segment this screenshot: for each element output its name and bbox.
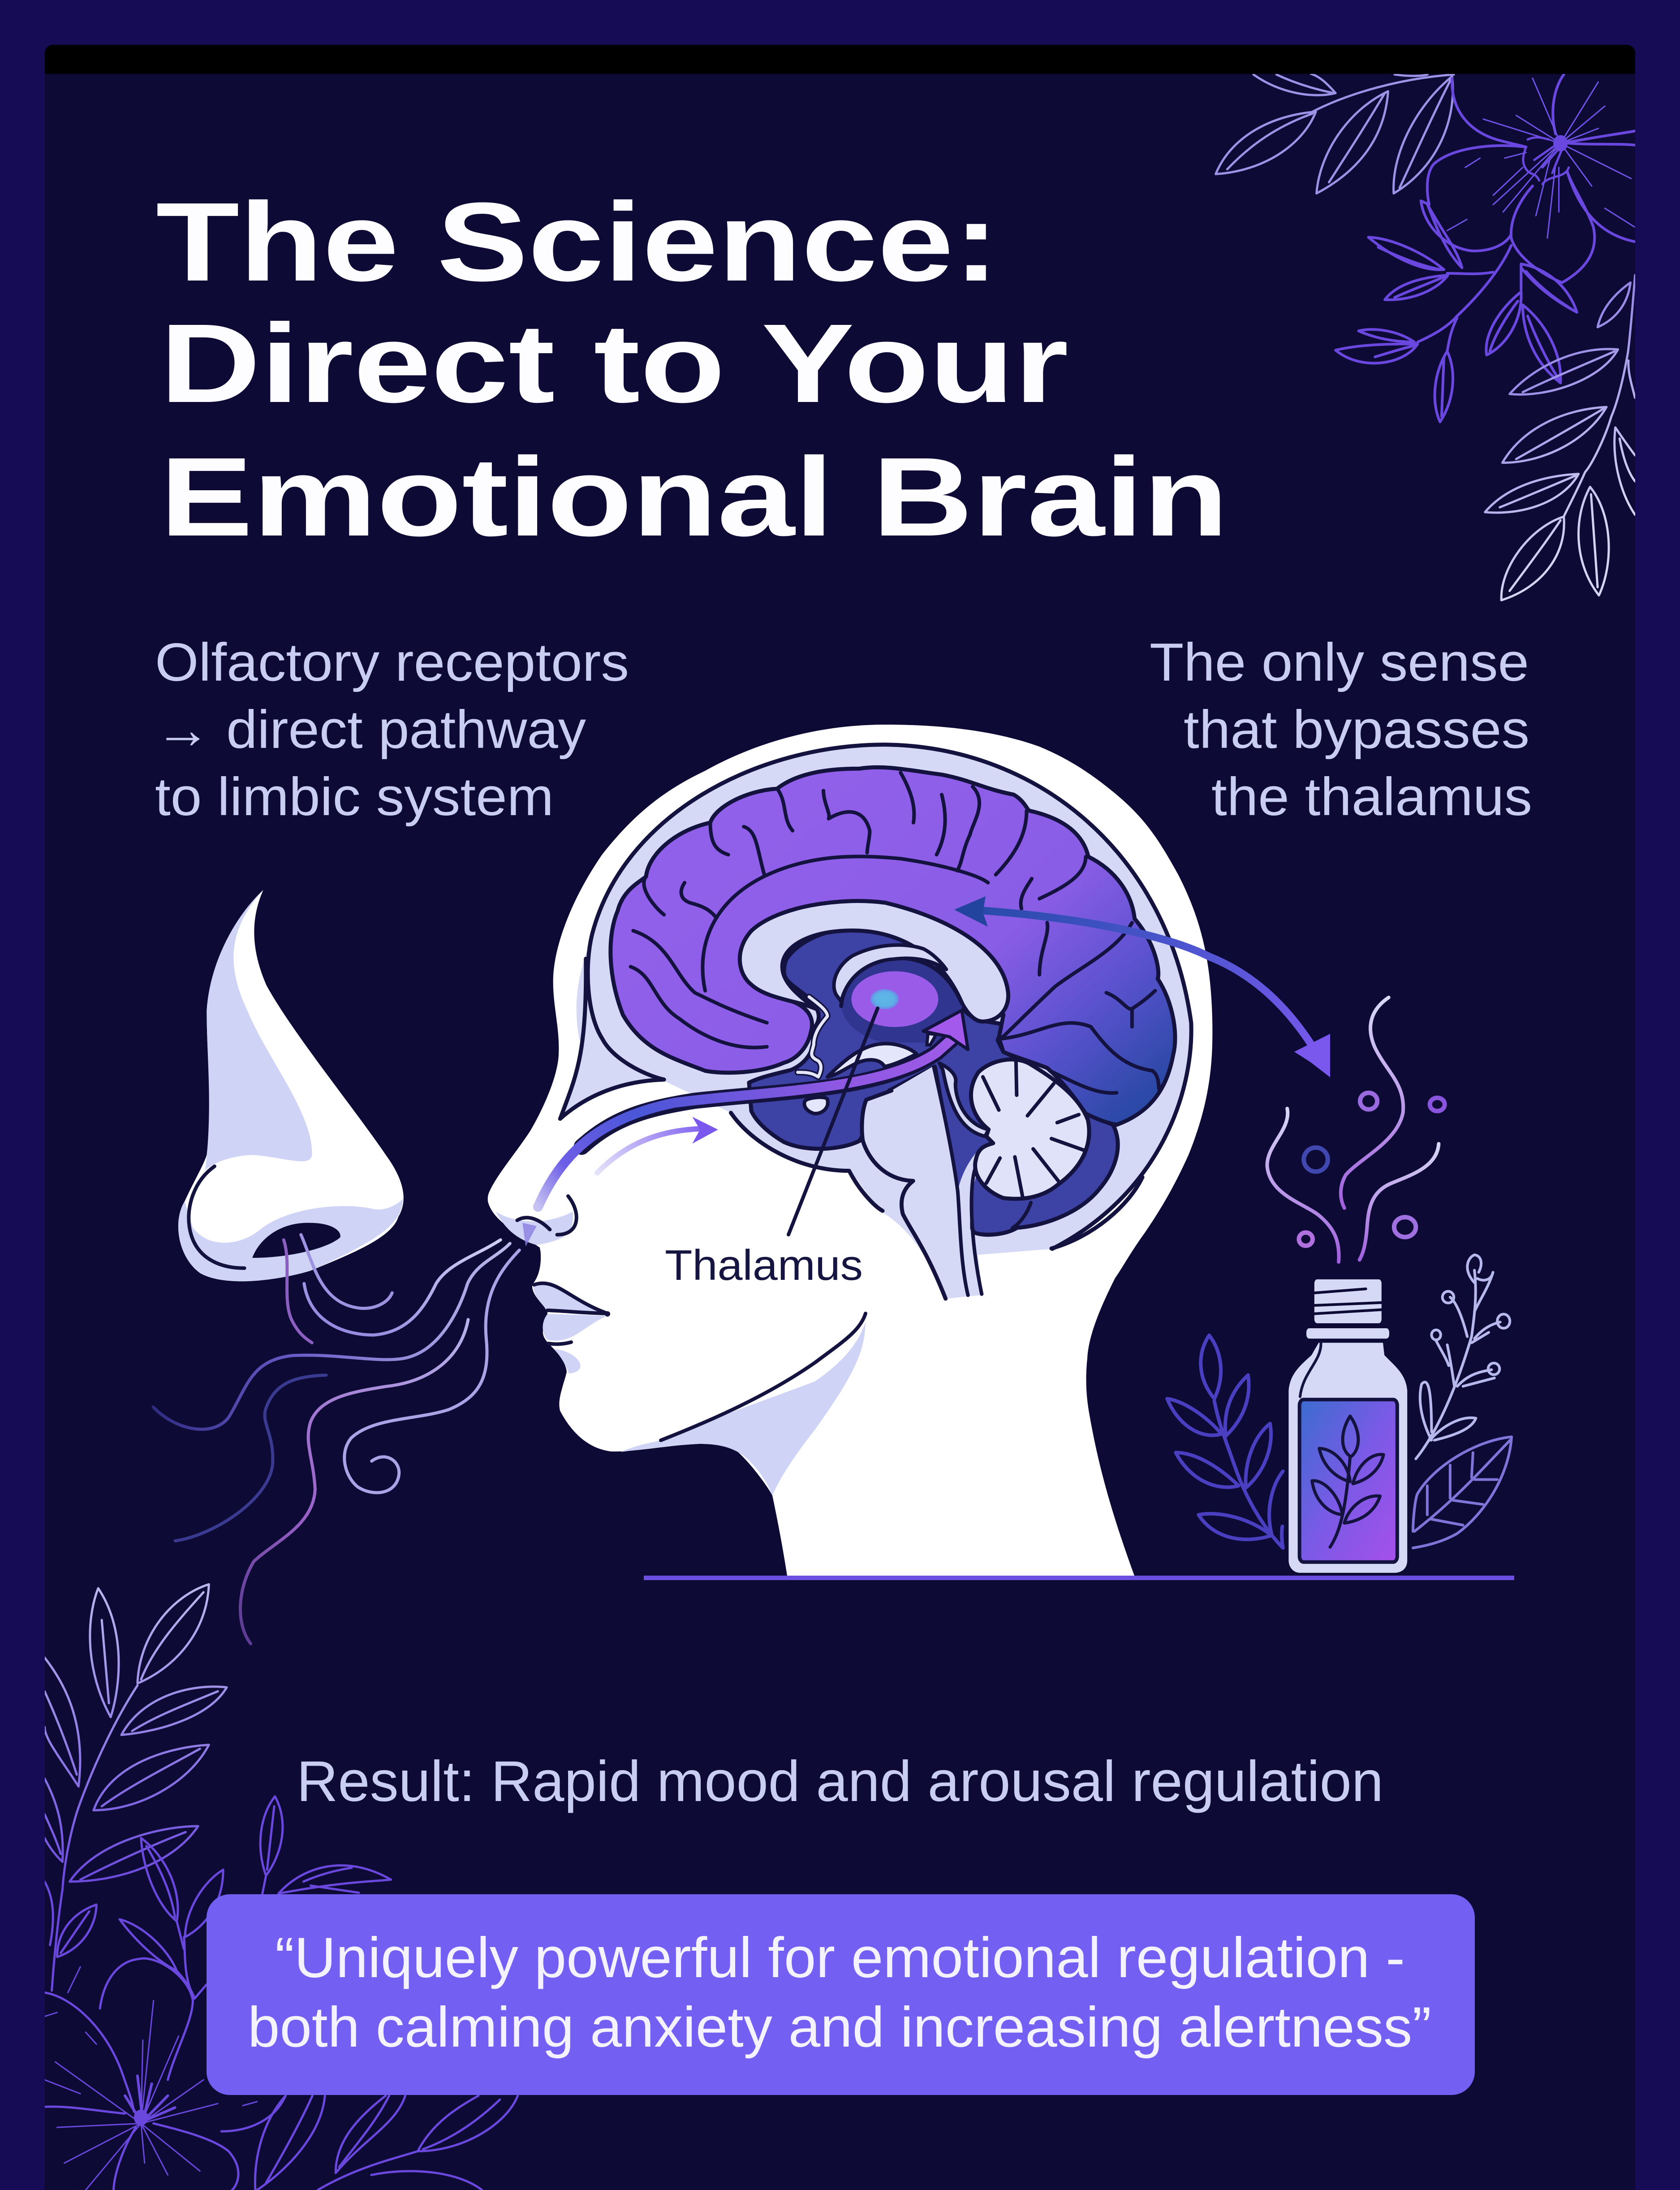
illustration: brain: [538, 745, 1191, 1299]
text block: bypasses thalamus: the thalamus: [1211, 767, 1532, 827]
lips and chin shading: [533, 1283, 610, 1374]
thalamus highlight: [852, 971, 938, 1027]
corpus callosum: [740, 901, 1008, 1022]
bottle cap: [1306, 1279, 1389, 1339]
illustration: head silhouette: [488, 725, 1212, 1576]
cerebellum: [971, 1059, 1089, 1228]
icon: nose: [178, 890, 404, 1281]
sprig on label: [1312, 1416, 1383, 1547]
bottle label: [1300, 1400, 1397, 1562]
callout: quote: “Uniquely powerful for emotional regulation -: [275, 1926, 1405, 1989]
left leaves: [1167, 1335, 1283, 1548]
frontal lobe fissure: [798, 997, 827, 1077]
title: Emotional Brain: [160, 434, 1228, 559]
pointer line to thalamus: [788, 1008, 878, 1235]
cerebral cortex: [611, 767, 1175, 1125]
callout: quote: [207, 1894, 1475, 2095]
rising aroma: [1267, 998, 1445, 1262]
right leaf: [1413, 1437, 1512, 1548]
text block: bypasses thalamus: The only sense: [1150, 632, 1529, 692]
result text: Result: Rapid mood and arousal regulation: [297, 1749, 1383, 1814]
callout: quote: both calming anxiety and increasing alertness”: [248, 1995, 1431, 2059]
text block: bypasses thalamus: [1150, 632, 1532, 827]
text block: olfactory pathway: to limbic system: [155, 767, 554, 827]
illustration: standalone nose with scent streams: [153, 890, 519, 1644]
arrow: olfactory pathway: [538, 1011, 968, 1207]
small structures: [804, 1033, 936, 1114]
skull lower arc: [1051, 1177, 1142, 1248]
text block: olfactory pathway: [155, 632, 629, 827]
limbic and cerebellum base: [749, 929, 1118, 1235]
thalamus chamber: [841, 958, 962, 1043]
illustration: essential oil bottle: [1167, 998, 1512, 1573]
cortex folds: [631, 773, 1163, 1093]
limbic interior: [798, 945, 1089, 1299]
jaw line and neck shadow: [620, 1313, 866, 1495]
skull and cortex: [560, 745, 1191, 1299]
thalamus label: Thalamus: [665, 1241, 863, 1289]
text block: olfactory pathway: Olfactory receptors: [155, 632, 629, 692]
title: Direct to Your: [160, 301, 1068, 426]
head shape: [488, 725, 1212, 1576]
arrow: small pathway: [597, 1117, 718, 1173]
title: The Science:: [156, 179, 999, 304]
title: [156, 179, 1228, 559]
bottle body: [1288, 1343, 1407, 1573]
baseline rule: [644, 1576, 1514, 1580]
brainstem: [862, 1063, 989, 1299]
right sprig: [1416, 1255, 1510, 1459]
decoration: top right floral: [1216, 74, 1635, 600]
text block: olfactory pathway: → direct pathway: [155, 700, 586, 760]
arrow: bottle to brain: [954, 896, 1330, 1077]
scent streams: [153, 1235, 519, 1644]
text block: bypasses thalamus: that bypasses: [1184, 700, 1529, 760]
nostril: [496, 1196, 577, 1247]
decoration: bottom left floral: [45, 1584, 518, 2190]
